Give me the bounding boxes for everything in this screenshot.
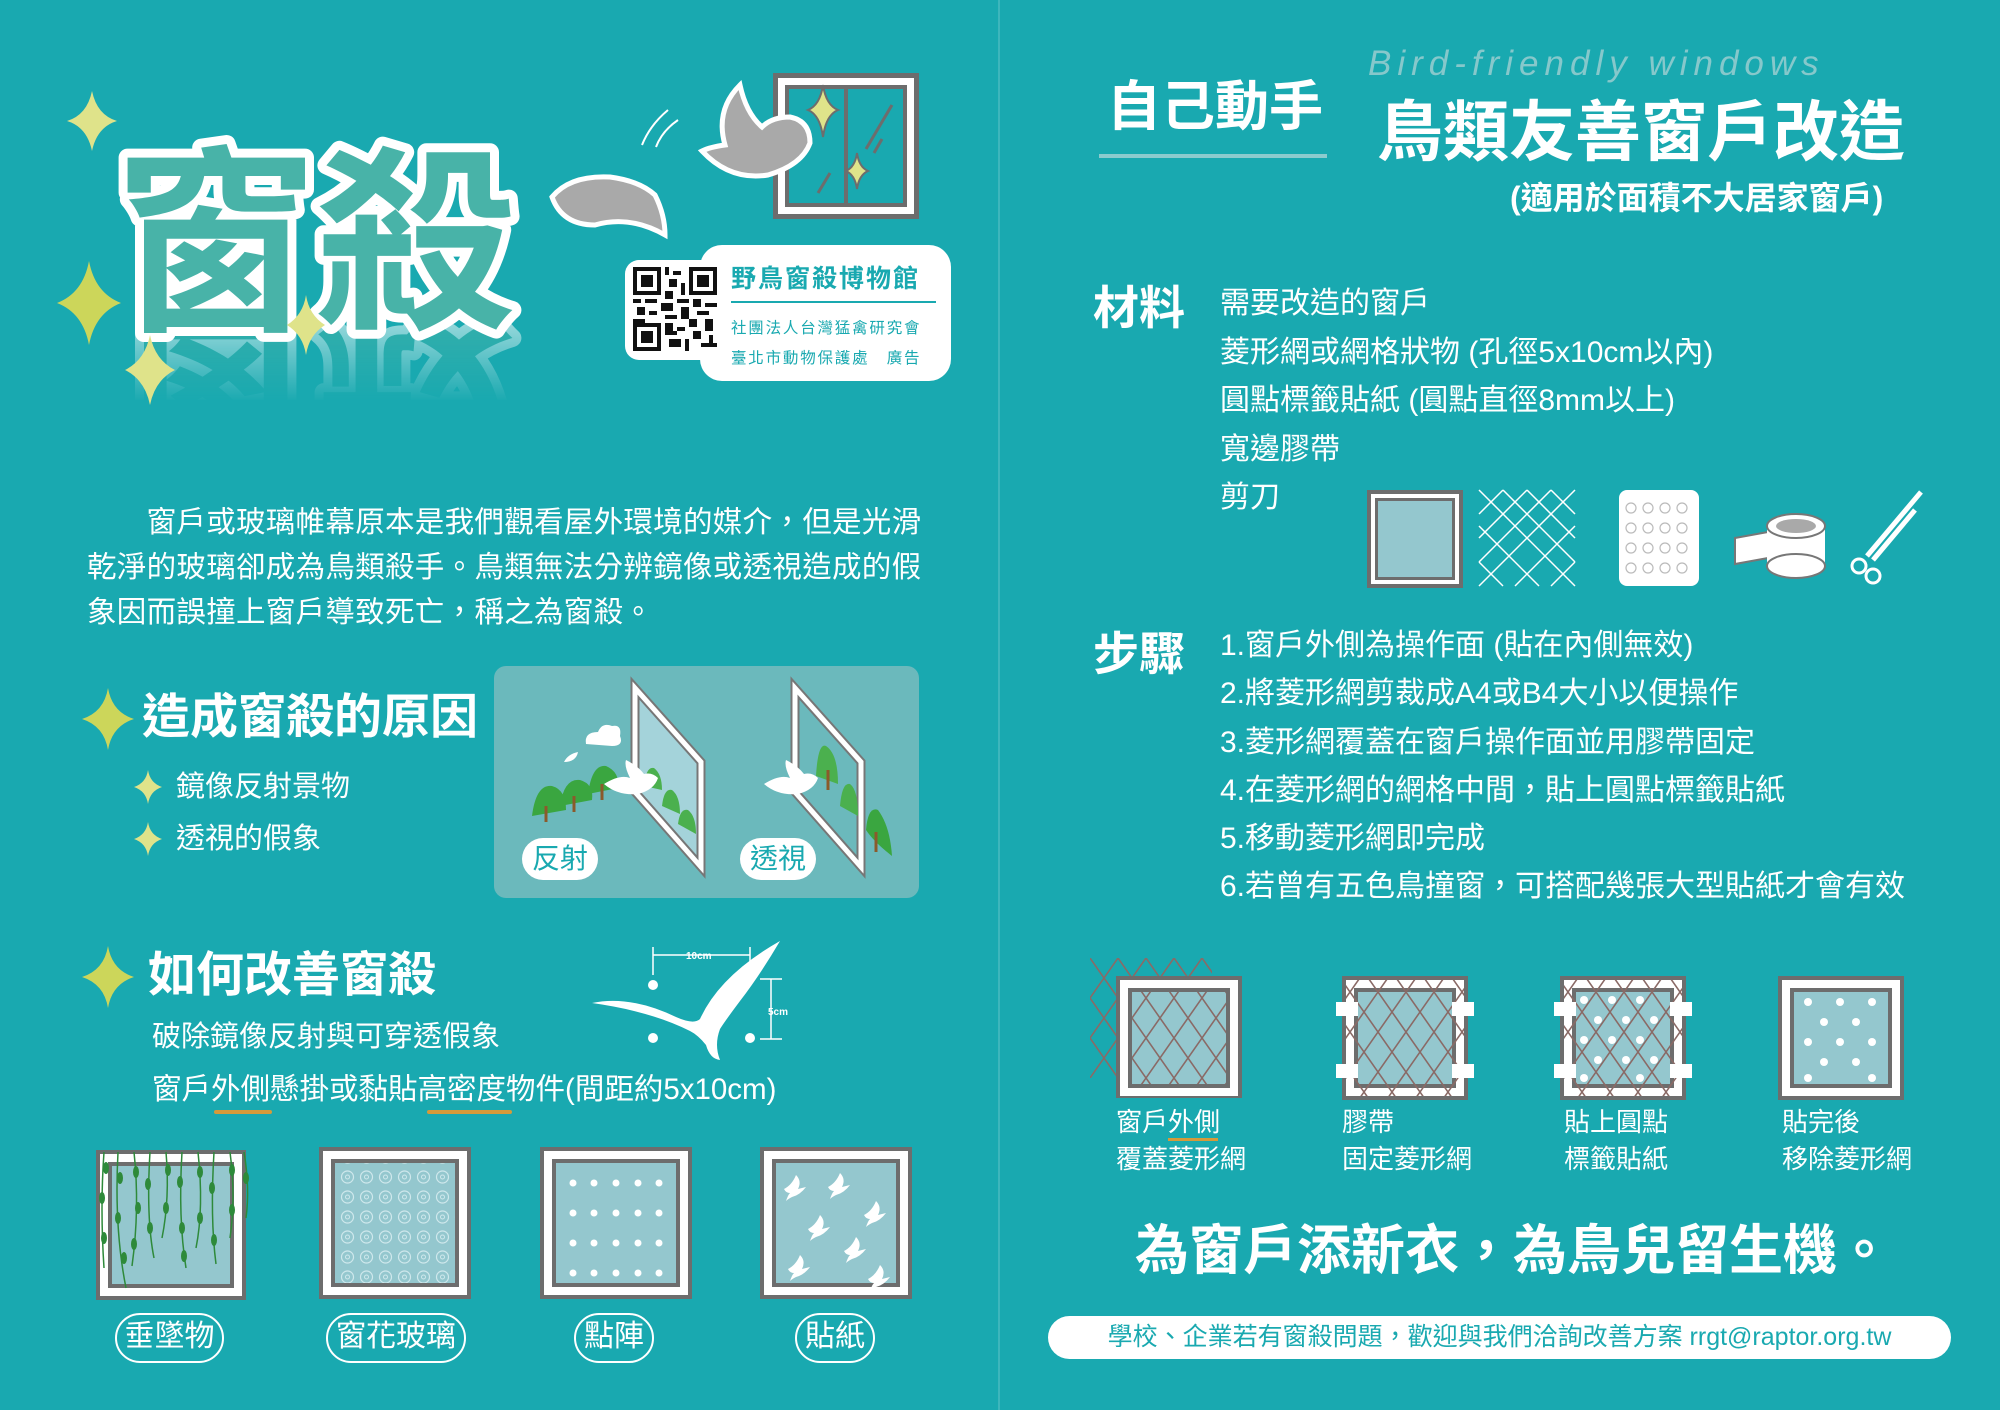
- heading: how to improve: [82, 946, 436, 1008]
- step 2: tape: 固定菱形網: [1342, 1144, 1472, 1174]
- panel: reflection vs transparency illustration: [494, 666, 919, 898]
- text block: intro paragraph: 窗戶或玻璃帷幕原本是我們觀看屋外環境的媒介，但是光滑: [147, 506, 921, 539]
- icon: window with vines: [96, 1150, 249, 1300]
- label: 垂墜物: [115, 1313, 224, 1363]
- step 1: cover net: 窗戶外側: [1116, 1107, 1220, 1137]
- heading: 步驟: 步驟: [1093, 628, 1185, 680]
- step 2: tape: [1336, 976, 1474, 1174]
- icon: window with bird stickers: [760, 1147, 912, 1299]
- label: 透視: 透視: [750, 843, 806, 874]
- step 4: remove net: 貼完後: [1782, 1107, 1860, 1137]
- heading: 自己動手: 自己動手: [1107, 77, 1323, 137]
- contact bar: [1048, 1316, 1951, 1359]
- label: 窗花玻璃: 窗花玻璃: [336, 1320, 456, 1353]
- title: 鳥類友善窗戶改造: 鳥類友善窗戶改造: [1377, 95, 1905, 169]
- heading: causes: 造成窗殺的原因: [142, 691, 478, 744]
- text block: improvement: [152, 1021, 776, 1114]
- icon: window with patterned glass: [319, 1147, 471, 1299]
- icon: bird spacing diagram: [592, 941, 788, 1060]
- divider: [998, 0, 1000, 1410]
- bullet list: causes: 透視的假象: [176, 823, 321, 855]
- list: steps: 3.菱形網覆蓋在窗戶操作面並用膠帶固定: [1220, 726, 1755, 759]
- list: materials: 剪刀: [1220, 481, 1280, 514]
- label: 反射: [522, 838, 598, 880]
- step 3: stickers: 標籤貼紙: [1564, 1144, 1668, 1174]
- label: 貼紙: [795, 1313, 875, 1363]
- icon: bird spacing diagram: 5cm: [768, 1007, 788, 1018]
- label: 點陣: [574, 1313, 654, 1363]
- list: steps: 6.若曾有五色鳥撞窗，可搭配幾張大型貼紙才會有效: [1220, 870, 1905, 903]
- callout: QR museum card: 社團法人台灣猛禽研究會: [731, 320, 921, 337]
- list: materials: 需要改造的窗戶: [1220, 287, 1430, 320]
- label: 貼紙: 貼紙: [805, 1320, 865, 1353]
- list: materials: 圓點標籤貼紙 (圓點直徑8mm以上): [1220, 384, 1675, 417]
- list: steps: 4.在菱形網的網格中間，貼上圓點標籤貼紙: [1220, 774, 1785, 807]
- list: materials: 菱形網或網格狀物 (孔徑5x10cm以內): [1220, 336, 1713, 368]
- text block: improvement: 破除鏡像反射與可穿透假象: [152, 1021, 500, 1053]
- list: steps: [1220, 629, 1905, 903]
- label: 透視: [740, 838, 816, 880]
- label: 點陣: 點陣: [584, 1320, 644, 1353]
- icon: bird spacing diagram: 10cm: [686, 951, 712, 962]
- list: steps: 2.將菱形網剪裁成A4或B4大小以便操作: [1220, 677, 1738, 710]
- slogan: 為窗戶添新衣，為鳥兒留生機。: [1135, 1221, 1891, 1281]
- step 4: remove net: [1778, 976, 1912, 1174]
- label: 垂墜物: 垂墜物: [124, 1320, 214, 1353]
- bullet list: causes: [134, 770, 350, 856]
- icon: QR code: [633, 267, 717, 351]
- list: steps: 5.移動菱形網即完成: [1220, 822, 1485, 855]
- title: 窗殺: 窗殺: [115, 83, 515, 373]
- heading: 材料: 材料: [1093, 282, 1185, 334]
- step 3: stickers: [1554, 976, 1692, 1174]
- label: 窗花玻璃: [326, 1313, 466, 1363]
- text block: intro paragraph: 乾淨的玻璃卻成為鳥類殺手。鳥類無法分辨鏡像或透視造成的假: [87, 551, 921, 584]
- icon: window with dot array: [540, 1147, 692, 1299]
- text block: intro paragraph: [87, 506, 921, 629]
- callout: QR museum card: 野鳥窗殺博物館: [731, 265, 920, 293]
- contact bar: 學校、企業若有窗殺問題，歡迎與我們洽詢改善方案 rrgt@raptor.org.tw: [1108, 1323, 1891, 1351]
- icon: birds hitting window: [549, 73, 919, 240]
- icons: materials: [1367, 490, 1923, 588]
- bullet list: causes: 鏡像反射景物: [176, 771, 350, 803]
- callout: QR museum card: [625, 245, 951, 381]
- step 1: cover net: 覆蓋菱形網: [1116, 1144, 1246, 1174]
- label: 反射: 反射: [532, 843, 588, 874]
- step 4: remove net: 移除菱形網: [1782, 1144, 1912, 1174]
- callout: QR museum card: 臺北市動物保護處 廣告: [731, 350, 921, 367]
- heading: how to improve: 如何改善窗殺: [148, 949, 436, 1002]
- list: materials: [1220, 287, 1713, 514]
- subtitle: scope: (適用於面積不大居家窗戶): [1510, 180, 1883, 216]
- step 3: stickers: 貼上圓點: [1564, 1107, 1668, 1137]
- step 2: tape: 膠帶: [1342, 1107, 1394, 1137]
- list: steps: 1.窗戶外側為操作面 (貼在內側無效): [1220, 629, 1693, 662]
- text block: intro paragraph: 象因而誤撞上窗戶導致死亡，稱之為窗殺。: [87, 596, 653, 629]
- subtitle: Bird-friendly windows: Bird-friendly windows: [1368, 44, 1825, 83]
- icon: sparkles around title: [57, 91, 325, 405]
- list: materials: 寬邊膠帶: [1220, 432, 1340, 466]
- text block: improvement: 窗戶外側懸掛或黏貼高密度物件(間距約5x10cm): [152, 1073, 776, 1106]
- step 1: cover net: [1090, 958, 1246, 1174]
